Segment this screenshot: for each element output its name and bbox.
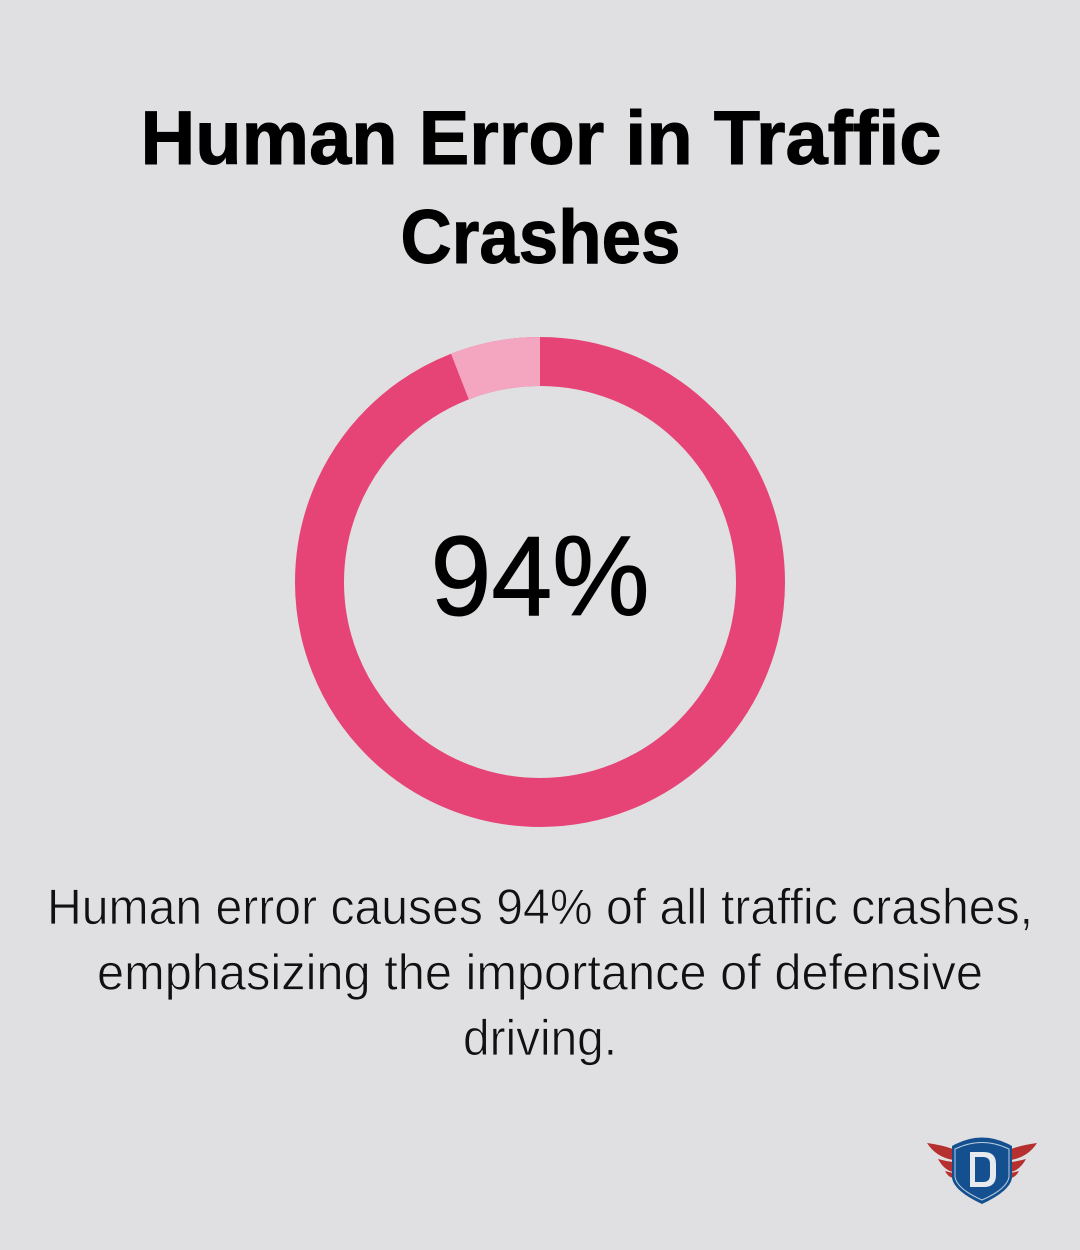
description text: Human error causes 94% of all traffic crashes,	[47, 879, 1033, 935]
donut chart: 94%	[320, 362, 760, 802]
center value: 94%	[430, 513, 650, 639]
description text: emphasizing the importance of defensive	[97, 944, 983, 1000]
remaining segment	[460, 362, 540, 377]
description text	[47, 879, 1033, 1066]
main segment	[320, 362, 760, 802]
title: Human Error in Traffic	[140, 96, 942, 181]
right wings	[1011, 1143, 1037, 1178]
letter D	[970, 1152, 996, 1187]
title: Crashes	[400, 195, 680, 280]
title	[140, 96, 942, 280]
shield	[952, 1138, 1012, 1204]
left wings	[927, 1143, 953, 1178]
description text: driving.	[463, 1010, 617, 1066]
icon: winged shield logo	[927, 1138, 1037, 1204]
shield inner outline	[955, 1142, 1009, 1200]
